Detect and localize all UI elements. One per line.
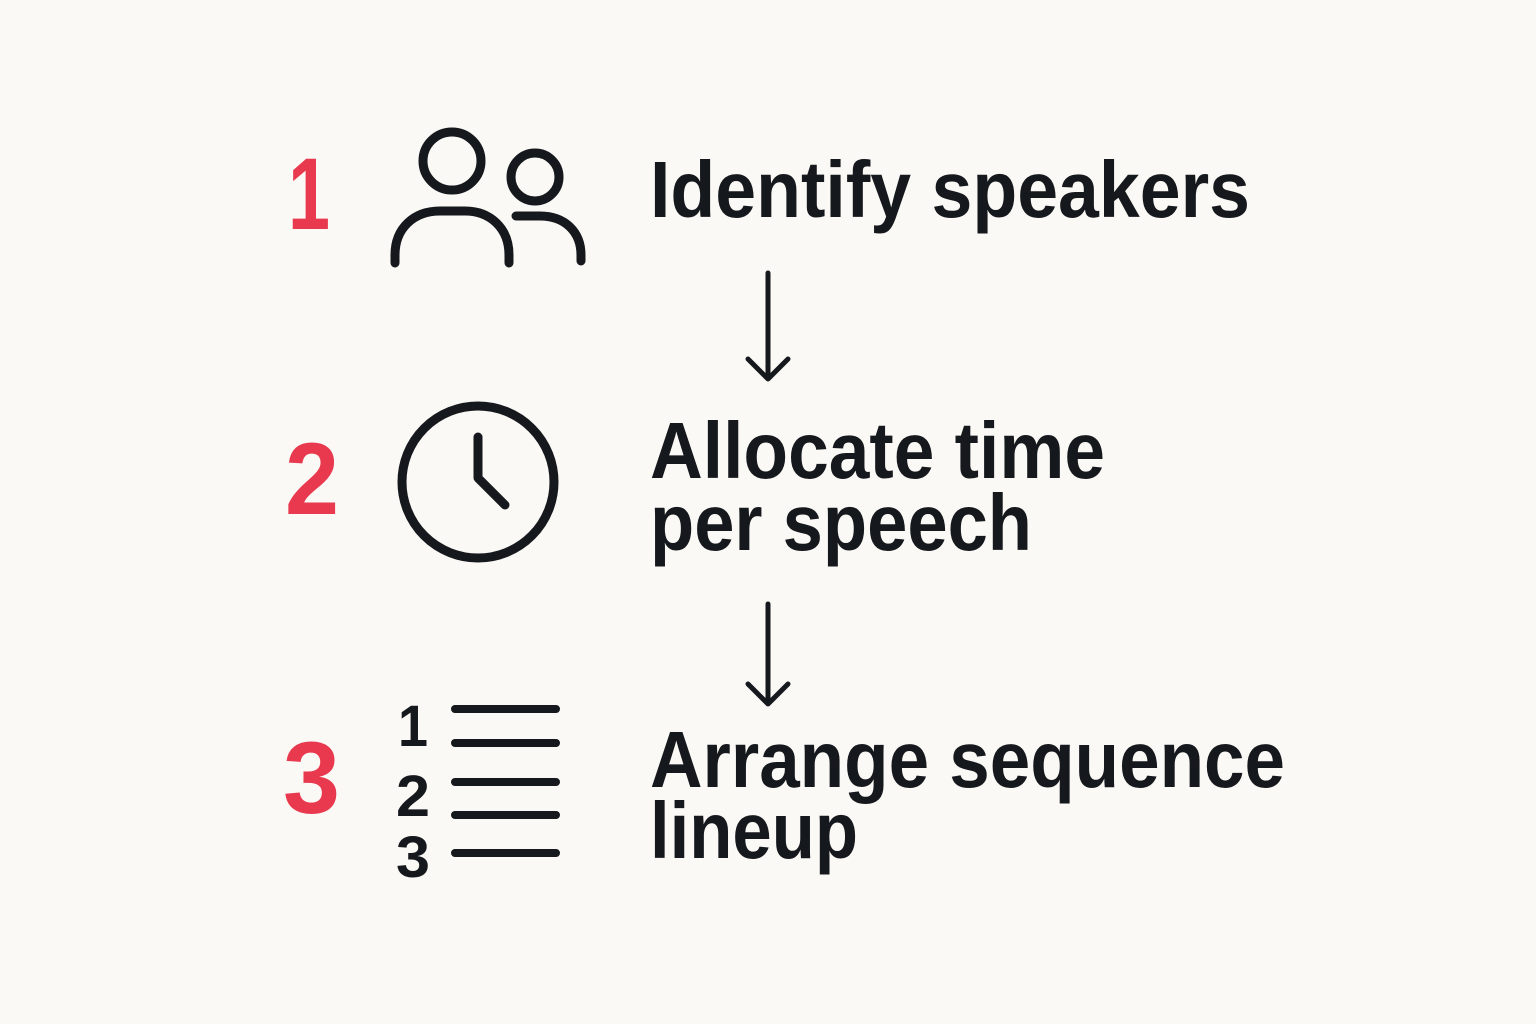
label: Identify speakers: Identify speakers <box>650 145 1250 234</box>
icon: numbered list: 1 <box>398 694 428 759</box>
step 1 <box>288 132 1250 263</box>
icon: numbered list: 2 <box>396 764 430 829</box>
number 1: 1 <box>288 137 330 251</box>
label: Arrange sequence lineup <box>650 715 1285 875</box>
arrow 2 <box>748 604 788 704</box>
number 2: 2 <box>285 422 339 536</box>
icon: numbered list <box>396 694 556 890</box>
number 3: 3 <box>283 721 340 835</box>
icon: numbered list: 3 <box>396 825 430 890</box>
arrow 1 <box>748 273 788 379</box>
label: Allocate time per speech <box>650 406 1105 567</box>
label: Allocate time per speech: per speech <box>650 478 1032 567</box>
label: Arrange sequence lineup: Arrange sequence <box>650 715 1285 804</box>
step 3 <box>283 694 1285 890</box>
icon: clock <box>402 406 554 558</box>
icon: people <box>395 132 581 263</box>
label: Arrange sequence lineup: lineup <box>650 786 858 875</box>
step 2 <box>285 406 1105 567</box>
label: Allocate time per speech: Allocate time <box>650 406 1105 495</box>
